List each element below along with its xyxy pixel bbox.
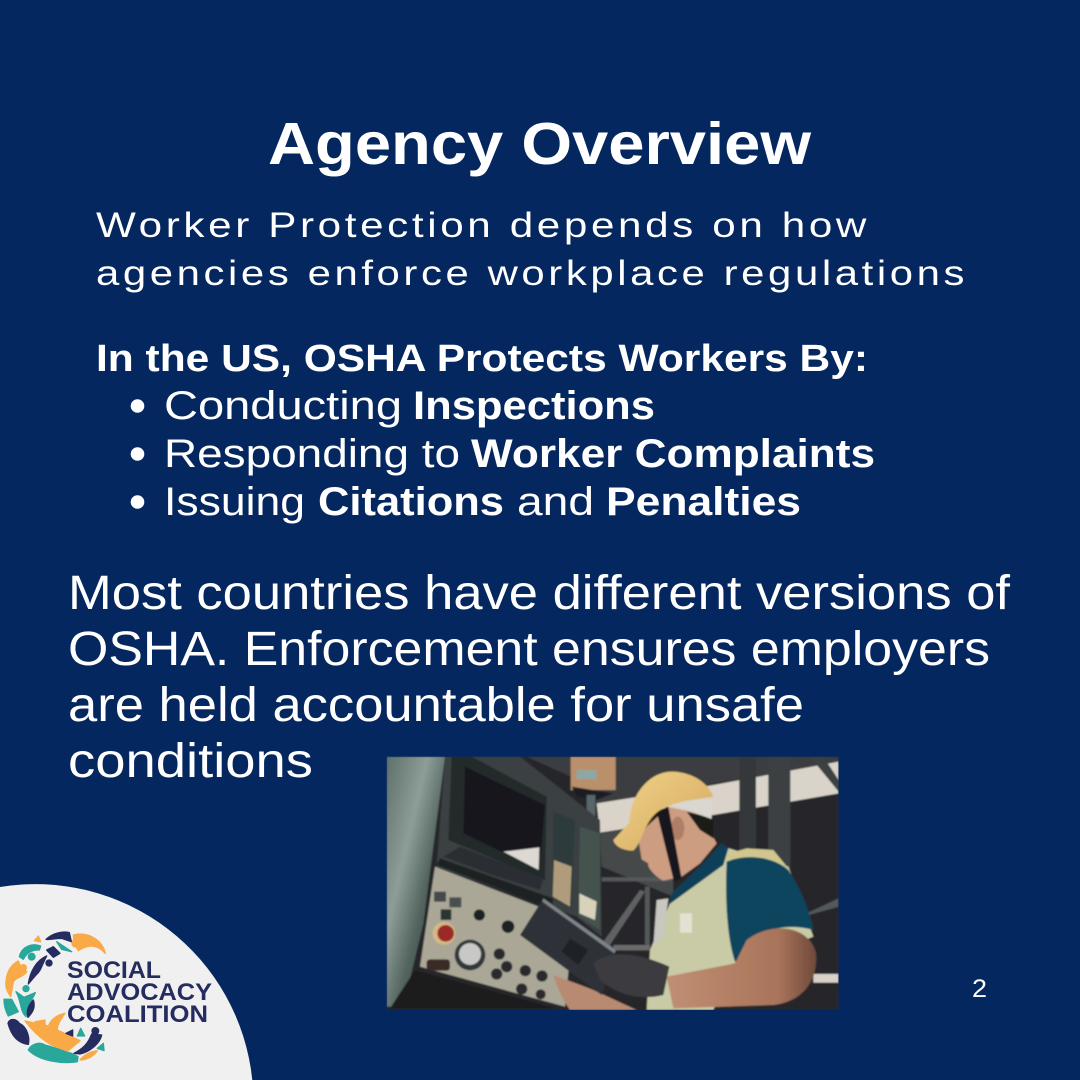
- logo badge: [0, 884, 252, 1080]
- logo emblem: [4, 932, 105, 1062]
- logo wordmark: COALITION: [67, 1001, 208, 1028]
- intro text block: agencies enforce workplace regulations: [96, 254, 968, 293]
- title: Agency Overview: [268, 111, 811, 177]
- bullet list: Penalties: [606, 480, 801, 524]
- bullet list: Responding to: [164, 432, 460, 476]
- closing statement: OSHA. Enforcement ensures employers: [68, 623, 990, 676]
- heading: OSHA list: In the US, OSHA Protects Workers By:: [96, 338, 868, 380]
- closing statement: conditions: [68, 735, 313, 788]
- closing statement: [68, 567, 1011, 788]
- closing statement: Most countries have different versions of: [68, 567, 1011, 620]
- logo wordmark: SOCIAL: [67, 957, 161, 984]
- bullet list: Citations: [318, 480, 504, 524]
- bullet list: Inspections: [413, 384, 655, 428]
- page number: 2: [972, 975, 987, 1003]
- closing statement: are held accountable for unsafe: [68, 679, 804, 732]
- bullet list: Worker Complaints: [471, 432, 875, 476]
- bullet list: [131, 384, 875, 524]
- bullet list: Issuing: [164, 480, 305, 524]
- logo wordmark: [67, 957, 212, 1028]
- bullet list: Conducting: [164, 384, 402, 428]
- intro text block: Worker Protection depends on how: [96, 206, 870, 245]
- bullet list: and: [517, 480, 594, 524]
- photo: worker at control panel: [387, 757, 839, 1010]
- logo wordmark: ADVOCACY: [67, 979, 212, 1006]
- intro text block: [96, 206, 968, 293]
